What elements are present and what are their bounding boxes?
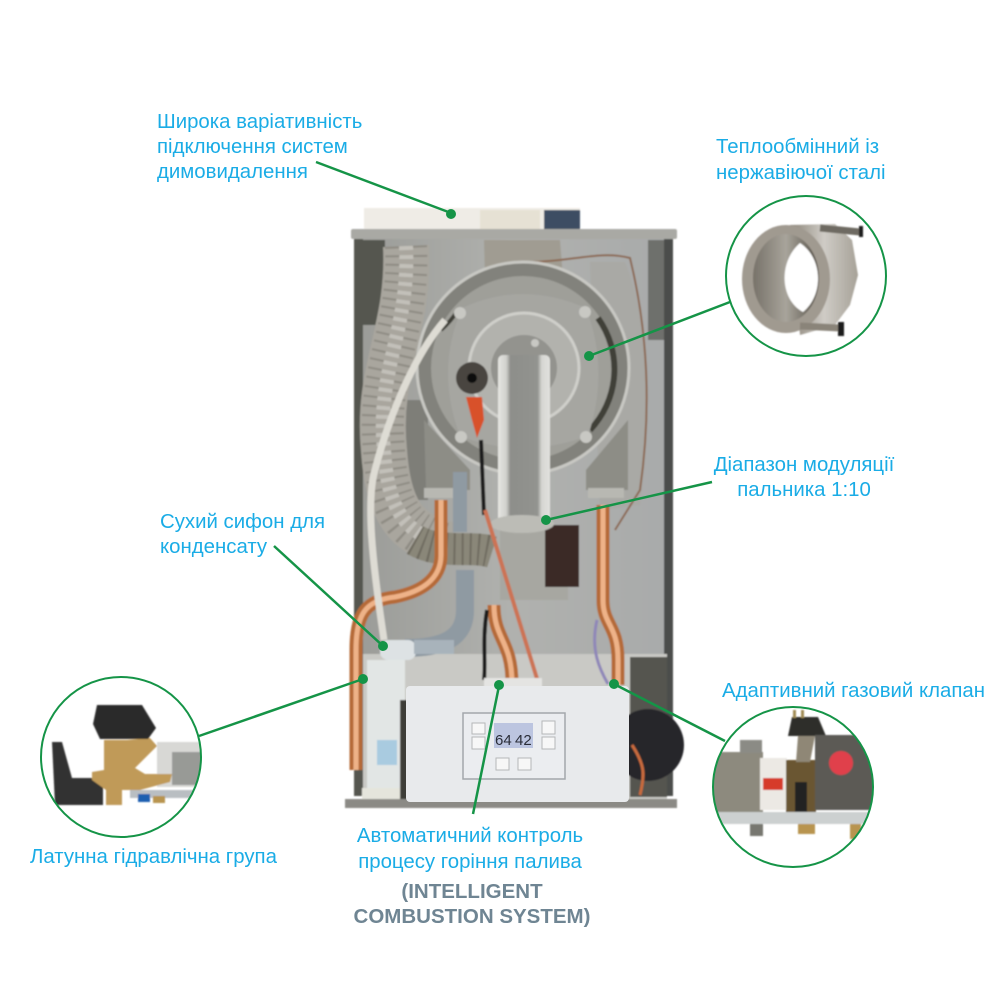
heat exchanger legs <box>424 420 628 532</box>
bottom bar <box>345 799 677 808</box>
burner bolts <box>454 306 592 443</box>
burner mid ring <box>469 313 579 423</box>
label: heat exchanger: Теплообмінний із <box>716 136 879 158</box>
brass body <box>92 738 172 805</box>
black parts under panel <box>400 700 684 800</box>
grey valve on right <box>157 742 202 787</box>
coil connectors <box>820 228 860 232</box>
label: burner modulation: пальника 1:10 <box>737 479 871 501</box>
callout line: combustion control <box>473 680 504 814</box>
terminal <box>484 678 542 688</box>
blue fitting <box>138 794 150 802</box>
pressure sensor <box>788 717 826 736</box>
white condensate tube <box>371 320 445 640</box>
black bracket <box>52 742 103 805</box>
coil opening <box>785 243 818 312</box>
label: flue systems: димовидалення <box>157 161 308 183</box>
brass and black centre <box>786 760 816 812</box>
manifold plate <box>130 790 195 798</box>
mounting plate <box>712 812 877 824</box>
label: dry siphon: конденсату <box>160 536 268 558</box>
label: flue systems: Широка варіативність <box>157 111 362 133</box>
red wire <box>485 510 538 682</box>
gas mixing pipe <box>498 355 550 523</box>
label: dry siphon: Сухий сифон для <box>160 511 325 533</box>
flexible air hose <box>383 246 450 545</box>
label: combustion control: процесу горіння палива <box>358 851 582 873</box>
valve body left <box>713 752 763 812</box>
callout line: burner modulation <box>541 482 712 525</box>
black wire <box>484 610 487 680</box>
fan and gas valve <box>490 515 579 600</box>
label: gas valve: Адаптивний газовий клапан <box>722 680 985 702</box>
LCD screen: 42 <box>515 732 532 749</box>
label: burner modulation: Діапазон модуляції <box>714 454 895 476</box>
callout line: flue <box>316 162 456 219</box>
second brass foot <box>153 796 165 803</box>
control panel <box>406 686 629 802</box>
top collar <box>484 240 563 278</box>
callout line: siphon <box>274 546 388 651</box>
burner dark gap <box>590 318 614 430</box>
siphon <box>362 640 454 800</box>
display frame <box>463 713 565 779</box>
thin wire <box>530 255 647 530</box>
burner outer ring <box>417 262 629 474</box>
igniter <box>456 362 488 515</box>
copper pipes <box>356 500 618 770</box>
label: combustion control: Автоматичний контроль <box>357 825 583 847</box>
coil outer face <box>742 225 830 333</box>
label: intelligent combustion system: COMBUSTION SYSTEM) <box>354 905 590 928</box>
boiler back panel <box>354 236 670 796</box>
exchanger hose elbow <box>415 540 492 552</box>
callout line: gas valve <box>609 679 725 741</box>
LCD screen <box>494 723 533 749</box>
red cap <box>829 751 853 775</box>
coil thread <box>753 234 819 322</box>
flue connection <box>364 208 580 231</box>
label: heat exchanger: нержавіючої сталі <box>716 162 886 184</box>
inset: gas valve <box>712 707 877 867</box>
right assembly <box>815 735 873 810</box>
buttons <box>472 721 555 770</box>
side walls <box>354 236 673 799</box>
burner inner plate <box>448 294 599 448</box>
label: flue systems: підключення систем <box>157 136 348 158</box>
boiler photo <box>345 208 684 808</box>
inset: heat exchanger <box>726 196 886 356</box>
right duct <box>590 262 646 510</box>
callout line: brass group <box>199 674 368 736</box>
label: intelligent combustion system: (INTELLIGENT <box>401 880 543 903</box>
black pump head <box>93 705 156 739</box>
grey drain pipe <box>405 570 465 648</box>
callout line: heat exchanger <box>584 302 730 361</box>
label: brass group: Латунна гідравлічна група <box>30 846 278 868</box>
LCD screen: 64 <box>495 732 512 749</box>
top bar <box>351 229 677 239</box>
coil body <box>790 224 858 335</box>
inset: brass hydraulic group <box>41 677 207 837</box>
